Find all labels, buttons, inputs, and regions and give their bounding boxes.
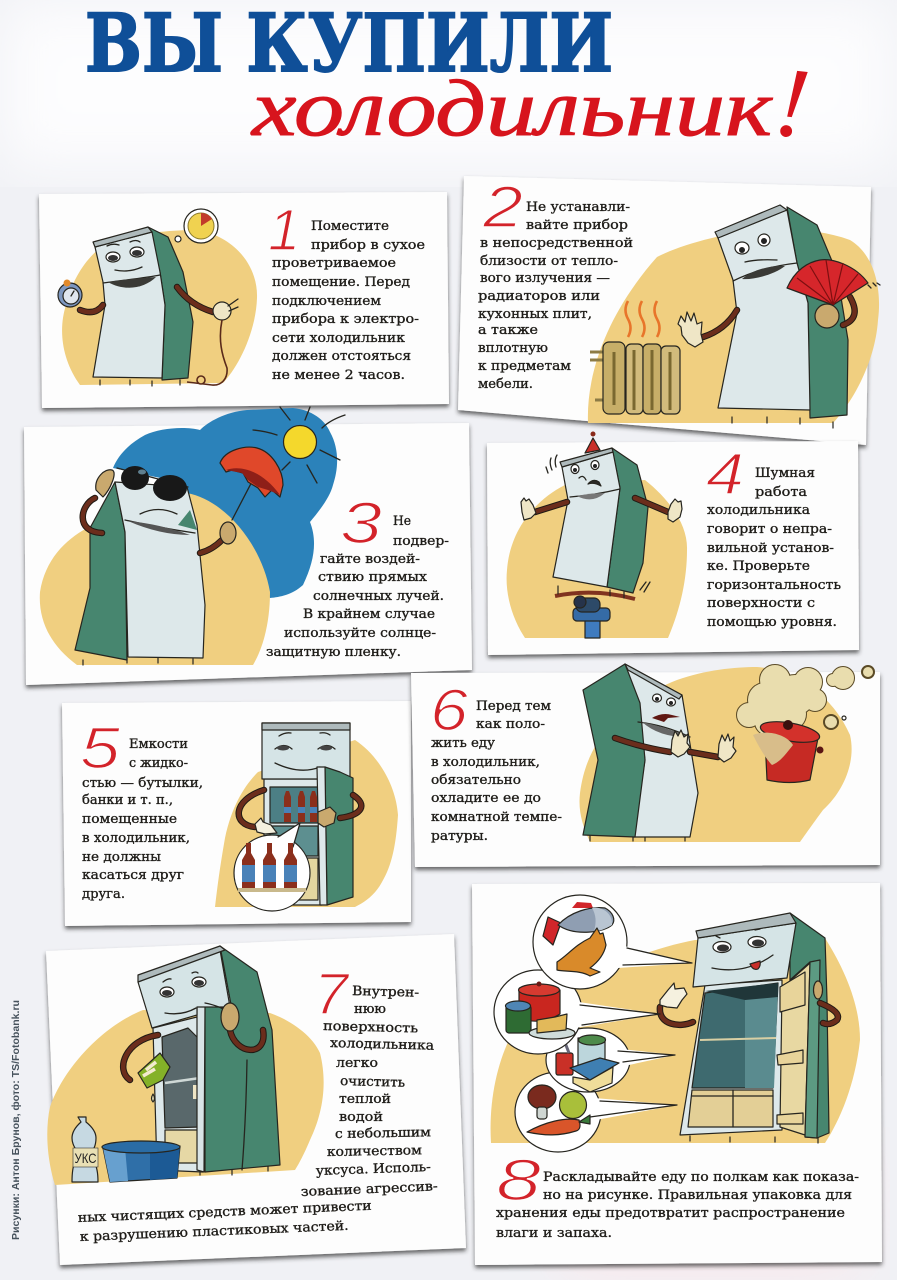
icon: red fan xyxy=(787,260,880,328)
text block 3: ствию прямых xyxy=(318,570,428,585)
text block 4: поверхности с xyxy=(707,596,815,611)
callout: cans and cheese xyxy=(546,1028,675,1092)
character: fridge 5 xyxy=(239,723,361,905)
text block 5: не должны xyxy=(82,850,161,865)
text block 2: к предметам xyxy=(478,359,571,374)
text block 4: холодильника xyxy=(707,503,810,518)
callout: fish and poultry xyxy=(533,895,692,989)
text block 4: ке. Проверьте xyxy=(707,559,810,574)
blue sky blob xyxy=(113,408,337,598)
icon: sunglasses xyxy=(117,466,188,501)
text block 1: помещение. Перед xyxy=(272,275,410,290)
number 6: 6 xyxy=(430,678,469,743)
text block 1: Поместите xyxy=(311,219,389,234)
text block 3: В крайнем случае xyxy=(303,607,435,622)
text block 7: очистить xyxy=(340,1074,405,1091)
character: fridge 3 xyxy=(75,482,205,665)
credit line: Рисунки: Антон Брунов, фото: TS/Fotobank.ru xyxy=(10,1000,22,1240)
text block 6: как поло- xyxy=(476,717,545,732)
character: fridge 1 xyxy=(93,227,193,386)
panel 8: food storage xyxy=(472,883,882,1265)
icon: green sponge xyxy=(138,1053,170,1102)
text block 1: сети холодильник xyxy=(272,331,405,346)
text block 7: количеством xyxy=(327,1143,422,1160)
text block 4: помощью уровня. xyxy=(707,615,837,630)
text block 1: прибора к электро- xyxy=(272,312,419,327)
number 2: 2 xyxy=(482,175,523,240)
text block 4: вильной установ- xyxy=(707,541,834,556)
number 1: 1 xyxy=(268,198,300,263)
text block 1: не менее 2 часов. xyxy=(272,368,405,383)
number 4: 4 xyxy=(706,442,744,507)
text block 1 xyxy=(272,219,425,383)
icon: stop hand xyxy=(678,310,737,347)
text block 3: солнечных лучей. xyxy=(313,589,444,604)
text block 4: работа xyxy=(755,485,807,500)
icon: plug and cord xyxy=(177,287,238,385)
yellow blob 7 xyxy=(47,1010,324,1185)
text block 3 xyxy=(266,514,449,660)
text block 8 xyxy=(496,1170,859,1241)
icon: party hat xyxy=(585,432,600,453)
icon: timer bubble xyxy=(175,209,218,243)
text block 6: в холодильник, xyxy=(431,755,540,770)
text block 5: Емкости xyxy=(129,737,188,752)
icon: red umbrella xyxy=(200,447,283,553)
text block 1: должен отстояться xyxy=(272,349,411,364)
text block 7: к разрушению пластиковых частей. xyxy=(80,1219,349,1245)
text block 8: но на рисунке. Правильная упаковка для xyxy=(543,1188,852,1203)
callout: bottles xyxy=(234,823,310,911)
text block 4: Шумная xyxy=(755,466,815,481)
text block 3: гайте воздей- xyxy=(320,552,420,567)
text block 6: охладите ее до xyxy=(431,791,541,806)
text block 5: друга. xyxy=(82,887,125,902)
text block 2: в непосредственной xyxy=(480,236,633,251)
text block 3: используйте солнце- xyxy=(284,626,436,641)
yellow blob 3 xyxy=(40,493,270,665)
panel 6: cool the food xyxy=(411,664,880,867)
panel 2: away from heat xyxy=(458,175,880,445)
text block 5: помещенные xyxy=(82,812,177,827)
text block 2: близости от тепло- xyxy=(480,254,618,269)
icon: vinegar bottle: УКС xyxy=(74,1150,96,1166)
number 7: 7 xyxy=(314,962,351,1027)
icon: vinegar bottle xyxy=(72,1117,98,1182)
text block 5: стью — бутылки, xyxy=(82,776,203,791)
text block 2: вого излучения — xyxy=(480,271,610,286)
text block 6: ратуры. xyxy=(431,829,488,844)
text block 7 xyxy=(78,984,438,1245)
text block 8: влаги и запаха. xyxy=(496,1226,612,1241)
text block 3: Не xyxy=(393,514,411,529)
callout: pots and cake xyxy=(494,970,660,1054)
number 3: 3 xyxy=(340,491,382,556)
icon: stopwatch in hand xyxy=(58,280,103,312)
text block 5 xyxy=(82,737,203,902)
text block 2: радиаторов или xyxy=(478,289,600,304)
icon: radiator xyxy=(590,342,680,414)
text block 8: хранения еды предотвратит распространение xyxy=(496,1206,845,1221)
text block 2 xyxy=(478,200,633,392)
callout: vegetables xyxy=(515,1072,677,1152)
text block 4 xyxy=(707,466,841,630)
text block 7: зование агрессив- xyxy=(301,1179,438,1200)
text block 7: холодильника xyxy=(330,1036,435,1054)
text block 2: кухонных плит, xyxy=(478,307,592,322)
text block 5: в холодильник, xyxy=(82,831,190,846)
title: ! xyxy=(770,46,815,159)
character: fridge 8 xyxy=(660,913,838,1143)
text block 5: касаться друг xyxy=(82,868,184,883)
text block 2: Не устанавли- xyxy=(526,200,630,215)
yellow blob 5 xyxy=(215,740,398,907)
panel 3: sun protection xyxy=(24,407,472,685)
text block 4: говорит о непра- xyxy=(707,522,832,537)
yellow blob 1 xyxy=(62,230,257,385)
text block 8: Раскладывайте еду по полкам как показа- xyxy=(543,1170,859,1185)
character: fridge 4 xyxy=(546,448,650,593)
icon: sun with rays xyxy=(253,407,345,483)
text block 1: прибор в сухое xyxy=(311,238,425,253)
character: fridge 6 xyxy=(583,664,698,841)
text block 5: банки и т. п., xyxy=(82,793,173,808)
text block 7: Внутрен- xyxy=(352,984,419,1001)
yellow blob 2 xyxy=(588,229,879,423)
yellow blob 4 xyxy=(507,480,687,638)
icon: steam clouds xyxy=(737,665,874,735)
text block 6: жить еду xyxy=(431,736,495,751)
text block 6: обязательно xyxy=(431,773,521,788)
text block 1: подключением xyxy=(272,294,381,309)
text block 1: проветриваемое xyxy=(272,256,396,271)
text block 2: вплотную xyxy=(478,341,548,356)
text block 6 xyxy=(431,699,562,844)
text block 4: горизонтальность xyxy=(707,578,841,593)
text block 3: подвер- xyxy=(393,534,449,549)
panel 4: noise xyxy=(487,432,859,655)
icon: blue bucket xyxy=(102,1141,180,1182)
text block 7: нюю xyxy=(354,1002,386,1017)
number 8: 8 xyxy=(496,1148,541,1213)
icon: red pot xyxy=(753,718,824,782)
text block 2: а также xyxy=(478,323,538,338)
panel 5: liquids xyxy=(62,701,411,926)
arm with hand on glasses xyxy=(83,470,114,533)
text block 7: уксуса. Исполь- xyxy=(316,1160,431,1179)
text block 7: ных чистящих средств может привести xyxy=(78,1199,372,1226)
text block 7: поверхность xyxy=(323,1019,418,1036)
arm and hands 6 xyxy=(615,730,736,762)
yellow blob 8 xyxy=(491,938,860,1143)
text block 7: водой xyxy=(339,1110,383,1125)
character: fridge 2 xyxy=(715,205,848,428)
arms and hands 4 xyxy=(521,498,682,522)
number 5: 5 xyxy=(80,716,121,781)
text block 2: вайте прибор xyxy=(526,218,628,233)
text block 5: с жидко- xyxy=(129,756,188,771)
title xyxy=(85,0,815,159)
icon: heat waves xyxy=(626,301,660,337)
text block 6: Перед тем xyxy=(476,699,551,714)
text block 7: легко xyxy=(336,1056,378,1071)
text block 7: теплой xyxy=(339,1092,391,1107)
text block 6: комнатной темпе- xyxy=(431,810,562,825)
panel 1: dry room xyxy=(39,192,449,408)
character: fridge 7 xyxy=(123,946,280,1175)
yellow blob 6 xyxy=(579,667,852,842)
text block 3: защитную пленку. xyxy=(266,645,401,660)
icon: plank and pipe xyxy=(555,586,635,638)
text block 2: мебели. xyxy=(478,377,533,392)
text block 7: с небольшим xyxy=(335,1125,431,1142)
panel 7: cleaning xyxy=(46,934,466,1265)
title: холодильник xyxy=(251,65,773,153)
